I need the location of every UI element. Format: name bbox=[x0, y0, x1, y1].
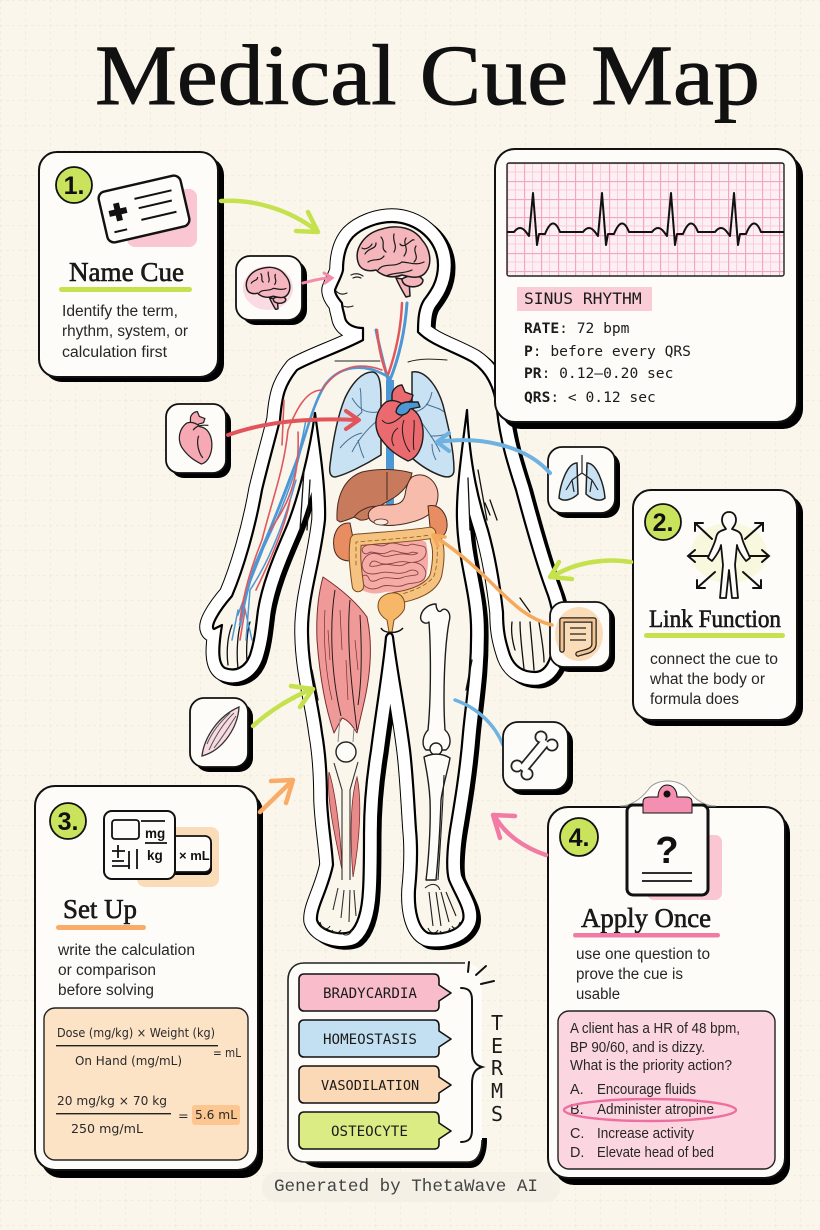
footer bbox=[262, 1172, 560, 1202]
question panel: A. bbox=[570, 1082, 584, 1098]
vertical label: terms: E bbox=[491, 1034, 503, 1058]
question panel: BP 90/60, and is dizzy. bbox=[570, 1040, 705, 1056]
icon tile: lungs bbox=[548, 447, 620, 518]
dosage formula panel: 5.6 mL bbox=[195, 1108, 238, 1123]
card 2: link function bbox=[633, 490, 803, 726]
arrow: link function to body bbox=[550, 561, 631, 579]
ECG values: PR: 0.12–0.20 sec bbox=[524, 365, 673, 382]
description: use one question to bbox=[576, 946, 710, 963]
dosage formula panel: = bbox=[178, 1109, 189, 1124]
arrow: intestine bbox=[433, 535, 552, 625]
term: bradycardia bbox=[299, 974, 451, 1011]
icon: body with arrows bbox=[688, 512, 769, 598]
description: usable bbox=[576, 986, 620, 1003]
badge 1: 1. bbox=[64, 172, 84, 200]
description bbox=[576, 946, 710, 1003]
underline bbox=[644, 633, 785, 638]
badge 4 bbox=[560, 818, 598, 856]
small intestine bbox=[350, 537, 428, 593]
underline bbox=[56, 925, 146, 930]
ECG values: QRS: < 0.12 sec bbox=[524, 389, 656, 406]
terms panel bbox=[288, 962, 504, 1168]
term: vasodilation bbox=[299, 1066, 451, 1103]
dosage formula panel: 20 mg/kg × 70 kg bbox=[57, 1094, 167, 1109]
question panel: A client has a HR of 48 bpm, bbox=[570, 1021, 740, 1037]
description: or comparison bbox=[58, 962, 156, 979]
large intestine bbox=[355, 533, 438, 598]
term: osteocyte: OSTEOCYTE bbox=[331, 1124, 408, 1140]
thigh muscle bbox=[317, 577, 370, 733]
neck and arm blood vessels bbox=[232, 303, 447, 640]
card 1: name cue bbox=[39, 152, 224, 382]
icon: calculation tiles bbox=[104, 811, 219, 887]
term: osteocyte bbox=[299, 1112, 451, 1149]
sparks bbox=[468, 962, 494, 984]
icon: calculation tiles: × mL bbox=[179, 848, 210, 863]
description: before solving bbox=[58, 982, 154, 999]
term: bradycardia: BRADYCARDIA bbox=[323, 986, 417, 1002]
dosage formula panel: 250 mg/mL bbox=[71, 1122, 144, 1137]
arrow: brain bbox=[303, 273, 332, 283]
question panel: Increase activity bbox=[597, 1126, 695, 1142]
underline bbox=[573, 933, 720, 938]
left foot and right foot toes bbox=[320, 922, 460, 935]
term: vasodilation: VASODILATION bbox=[321, 1078, 419, 1094]
badge 2: 2. bbox=[653, 509, 673, 537]
heading: Set Up: Set Up bbox=[63, 894, 137, 924]
brace bbox=[461, 988, 482, 1142]
icon tile: muscle bbox=[190, 698, 253, 772]
body figure bbox=[213, 222, 558, 937]
description: Identify the term, bbox=[62, 303, 178, 320]
icon tile: brain bbox=[236, 256, 307, 325]
description: prove the cue is bbox=[576, 966, 683, 983]
arrow: lungs bbox=[437, 433, 550, 473]
vertical label: terms: S bbox=[491, 1102, 503, 1126]
arrow: muscle bbox=[253, 686, 313, 726]
description: formula does bbox=[650, 691, 739, 708]
dosage formula panel: Dose (mg/kg) × Weight (kg) bbox=[57, 1026, 215, 1041]
badge 3 bbox=[50, 803, 86, 839]
hand and limb contour lines bbox=[227, 470, 544, 700]
icon: clipboard with question bbox=[620, 781, 722, 900]
badge 2 bbox=[645, 504, 681, 540]
icon tile: heart bbox=[166, 404, 231, 478]
vertical label: terms bbox=[491, 1011, 504, 1126]
liver bbox=[337, 469, 412, 522]
body sticker outline bbox=[213, 222, 558, 937]
lungs bbox=[330, 372, 454, 477]
question panel: B. bbox=[570, 1102, 584, 1118]
arrow: apply once bbox=[493, 815, 546, 855]
question panel: What is the priority action? bbox=[570, 1058, 732, 1074]
knee and lower leg muscles bbox=[328, 718, 360, 922]
footer: Generated by ThetaWave AI bbox=[274, 1177, 538, 1197]
vertical label: terms: R bbox=[491, 1056, 504, 1080]
label: sinus rhythm bbox=[517, 287, 652, 311]
badge 1 bbox=[56, 167, 92, 203]
dosage formula panel bbox=[44, 1008, 248, 1160]
arrow: set up bbox=[260, 780, 293, 812]
heading: Name Cue: Name Cue bbox=[69, 257, 184, 287]
question panel bbox=[558, 1011, 775, 1169]
icon: ID card bbox=[97, 174, 197, 247]
ECG values: RATE: 72 bpm bbox=[524, 320, 630, 337]
vertical label: terms: M bbox=[491, 1079, 503, 1103]
badge 3: 3. bbox=[58, 808, 78, 836]
description bbox=[649, 651, 778, 708]
ECG values: P: before every QRS bbox=[524, 343, 691, 360]
question panel: C. bbox=[570, 1126, 584, 1142]
answer highlight ellipse bbox=[564, 1099, 736, 1121]
description: connect the cue to bbox=[650, 651, 778, 668]
right leg bones bbox=[421, 604, 456, 926]
question panel: Elevate head of bed bbox=[597, 1145, 714, 1161]
heart bbox=[376, 385, 423, 461]
face details bbox=[336, 274, 363, 307]
question panel: D. bbox=[570, 1145, 584, 1161]
question panel: Administer atropine bbox=[597, 1102, 714, 1118]
description: rhythm, system, or bbox=[62, 323, 188, 340]
description: calculation first bbox=[62, 344, 168, 361]
kidneys bbox=[334, 506, 447, 561]
dosage formula panel: On Hand (mg/mL) bbox=[75, 1054, 182, 1069]
description bbox=[57, 942, 195, 999]
ECG strip bbox=[507, 163, 784, 276]
arrow: name cue to head bbox=[221, 201, 318, 232]
label: sinus rhythm: SINUS RHYTHM bbox=[524, 289, 642, 308]
descending aorta bbox=[386, 380, 394, 526]
dosage formula panel: = mL bbox=[213, 1046, 242, 1061]
card 3: set up bbox=[35, 786, 263, 1178]
badge 4: 4. bbox=[569, 824, 589, 852]
brain bbox=[357, 227, 430, 297]
card: ECG sinus rhythm bbox=[495, 149, 803, 429]
rectum and pelvis bbox=[378, 593, 405, 632]
ECG values bbox=[524, 320, 691, 406]
icon tile: intestine bbox=[550, 602, 615, 672]
arrow: bone bbox=[455, 700, 503, 745]
vertical label: terms: T bbox=[491, 1011, 503, 1035]
icon: calculation tiles: kg bbox=[147, 848, 163, 863]
stomach bbox=[368, 475, 438, 526]
term: homeostasis: HOMEOSTASIS bbox=[323, 1032, 417, 1048]
underline bbox=[59, 287, 192, 292]
heading: Link Function: Link Function bbox=[649, 606, 781, 633]
description: what the body or bbox=[649, 671, 765, 688]
description bbox=[62, 303, 188, 361]
term: homeostasis bbox=[299, 1020, 451, 1057]
icon: calculation tiles: mg bbox=[145, 826, 165, 841]
heading: Apply Once: Apply Once bbox=[581, 903, 711, 933]
description: write the calculation bbox=[57, 942, 195, 959]
title: Medical Cue Map bbox=[95, 27, 760, 123]
question panel: Encourage fluids bbox=[597, 1082, 696, 1098]
arrow: heart bbox=[228, 411, 359, 435]
icon: clipboard with question: ? bbox=[655, 830, 679, 872]
icon tile: bone bbox=[503, 722, 573, 795]
card 4: apply once bbox=[548, 781, 790, 1185]
